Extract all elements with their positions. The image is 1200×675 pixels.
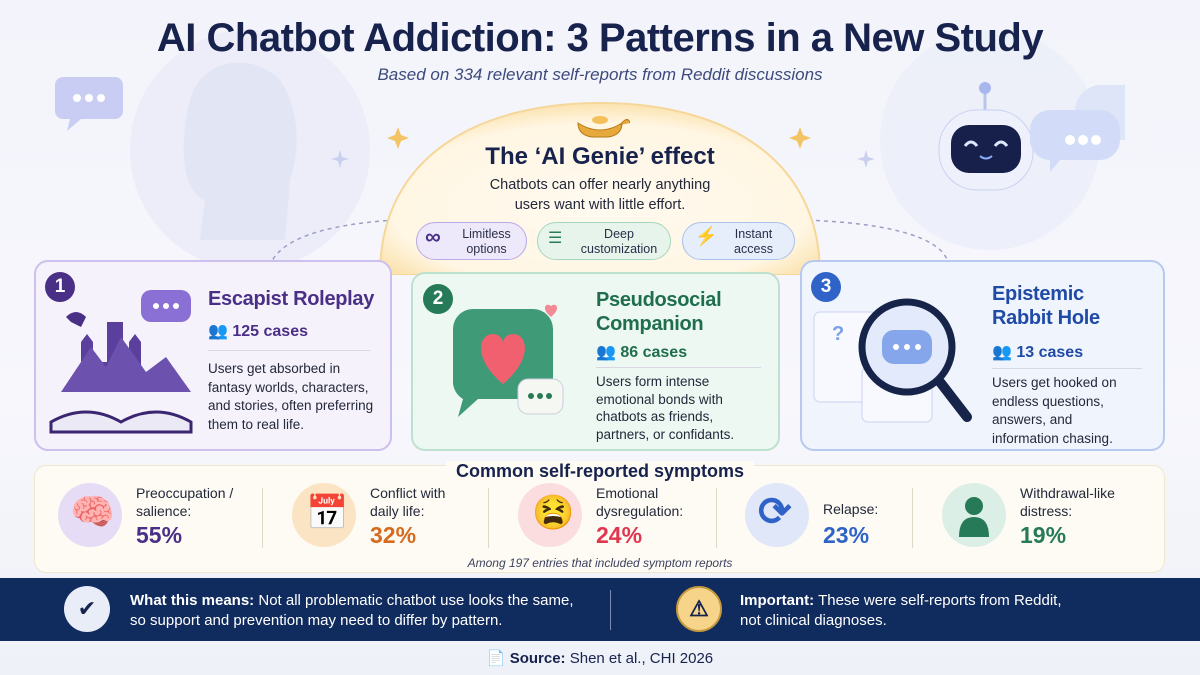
card 3 cases: 👥 13 cases bbox=[992, 344, 1083, 361]
card 2 cases: 👥 86 cases bbox=[596, 344, 687, 361]
card 3 title bbox=[992, 283, 1100, 329]
pill: limitless options: Limitless bbox=[462, 227, 511, 241]
card 1 title: Escapist Roleplay bbox=[208, 288, 374, 310]
symptom: preoccupation: salience: bbox=[136, 503, 191, 519]
card 1 cases: 👥 125 cases bbox=[208, 323, 308, 340]
pill: instant access: ⚡ bbox=[695, 226, 717, 246]
icon: warning bbox=[676, 586, 722, 632]
symptom: relapse: ⟳ bbox=[758, 490, 792, 534]
number 3 bbox=[811, 272, 841, 302]
symptom: conflict: Conflict with bbox=[370, 485, 445, 501]
number 2: 2 bbox=[433, 288, 443, 309]
pill: instant access: access bbox=[734, 242, 773, 256]
genie heading: The ‘AI Genie’ effect bbox=[485, 143, 715, 170]
icon: warning: ⚠ bbox=[689, 596, 709, 621]
icon: robot bbox=[938, 82, 1125, 190]
pill: instant access bbox=[682, 222, 795, 260]
important text: Important: These were self-reports from Reddit, bbox=[740, 592, 1062, 609]
genie text: Chatbots can offer nearly anything bbox=[490, 177, 710, 193]
panel: card 3 epistemic rabbit hole bbox=[800, 260, 1165, 451]
pill: deep customization: Deep bbox=[604, 227, 634, 241]
pill: limitless options: ∞ bbox=[425, 224, 441, 249]
icon: castle book bbox=[50, 290, 192, 434]
pill: deep customization: ☰ bbox=[548, 230, 562, 247]
symptom: conflict bbox=[292, 483, 445, 548]
icon: heart bubble bbox=[453, 304, 564, 417]
symptom: preoccupation: 🧠 bbox=[70, 491, 115, 532]
pill: deep customization: customization bbox=[581, 242, 657, 256]
pill: limitless options: options bbox=[466, 242, 507, 256]
pill: limitless options bbox=[416, 222, 527, 260]
card 1 description bbox=[208, 361, 373, 432]
genie text: users want with little effort. bbox=[515, 197, 685, 213]
symptom: emotional dysregulation: Emotional bbox=[596, 485, 658, 501]
number 2 bbox=[423, 284, 453, 314]
card 2 title: Companion bbox=[596, 313, 703, 335]
source: 📄 Source: Shen et al., CHI 2026 bbox=[487, 650, 713, 667]
symptom: withdrawal: distress: bbox=[1020, 503, 1072, 519]
panel: AI Genie effect bbox=[380, 102, 820, 275]
what this means text bbox=[130, 592, 574, 629]
card 1 description: Users get absorbed in bbox=[208, 361, 340, 376]
panel: symptoms bbox=[34, 465, 1165, 573]
symptom: withdrawal: 19% bbox=[1020, 522, 1066, 548]
icon: lamp bbox=[578, 116, 630, 138]
card 3 description: endless questions, bbox=[992, 394, 1104, 408]
what this means text: What this means: Not all problematic chatbot use looks the same, bbox=[130, 592, 574, 609]
symptom: conflict: daily life: bbox=[370, 503, 424, 519]
number 1 bbox=[45, 272, 75, 302]
symptom: withdrawal bbox=[942, 483, 1115, 548]
pill: deep customization bbox=[537, 222, 671, 260]
card 2 description bbox=[596, 374, 734, 442]
symptom: relapse bbox=[745, 483, 878, 548]
card 2 title: Pseudosocial bbox=[596, 289, 721, 311]
genie text bbox=[490, 177, 710, 213]
card 3 description: Users get hooked on bbox=[992, 375, 1117, 390]
card 3 description: information chasing. bbox=[992, 430, 1113, 446]
symptoms heading: Common self-reported symptoms bbox=[456, 461, 744, 481]
panel: bottom band bbox=[0, 578, 1200, 641]
important text bbox=[740, 592, 1062, 629]
symptom: preoccupation: 55% bbox=[136, 522, 182, 548]
card 2 description: emotional bonds with bbox=[596, 392, 723, 406]
symptom: relapse: 23% bbox=[823, 522, 869, 548]
number 3: 3 bbox=[821, 276, 831, 297]
symptom: emotional dysregulation: 24% bbox=[596, 522, 642, 548]
symptom: conflict: 📅 bbox=[306, 494, 348, 532]
symptom: withdrawal: Withdrawal-like bbox=[1020, 485, 1115, 501]
panel: card 2 pseudosocial companion bbox=[411, 272, 780, 451]
card 3 title: Epistemic bbox=[992, 283, 1084, 305]
card 3 title: Rabbit Hole bbox=[992, 307, 1100, 329]
symptom: emotional dysregulation: dysregulation: bbox=[596, 503, 683, 519]
icon: left chat bubble bbox=[55, 77, 123, 131]
card 3 description: answers, and bbox=[992, 412, 1072, 427]
icon: shield bbox=[64, 586, 110, 632]
icon: shield: ✔ bbox=[78, 596, 96, 621]
number 1: 1 bbox=[55, 276, 65, 297]
card 2 title bbox=[596, 289, 721, 335]
symptom: preoccupation bbox=[58, 483, 234, 548]
card 1 description: them to real life. bbox=[208, 416, 304, 432]
subtitle: Based on 334 relevant self-reports from Reddit discussions bbox=[377, 65, 823, 84]
card 2 description: partners, or confidants. bbox=[596, 426, 734, 442]
what this means text: so support and prevention may need to differ by pattern. bbox=[130, 612, 502, 629]
symptom: preoccupation: Preoccupation / bbox=[136, 485, 233, 501]
symptoms footnote: Among 197 entries that included symptom reports bbox=[468, 556, 732, 570]
card 2 description: chatbots as friends, bbox=[596, 409, 713, 424]
panel: card 1 escapist roleplay bbox=[34, 260, 392, 451]
symptom: relapse: Relapse: bbox=[823, 501, 878, 517]
icon: magnifier: ? bbox=[832, 323, 844, 345]
symptom: emotional dysregulation: 😫 bbox=[532, 494, 574, 532]
symptom: emotional dysregulation bbox=[518, 483, 683, 548]
card 1 description: fantasy worlds, characters, bbox=[208, 380, 369, 394]
symptom: conflict: 32% bbox=[370, 522, 416, 548]
icon: magnifier bbox=[814, 298, 972, 422]
card 3 description bbox=[992, 375, 1117, 446]
pill: instant access: Instant bbox=[735, 227, 772, 241]
card 2 description: Users form intense bbox=[596, 374, 709, 389]
important text: not clinical diagnoses. bbox=[740, 612, 887, 629]
title: AI Chatbot Addiction: 3 Patterns in a New Study bbox=[157, 16, 1043, 60]
card 1 description: and stories, often preferring bbox=[208, 398, 373, 413]
